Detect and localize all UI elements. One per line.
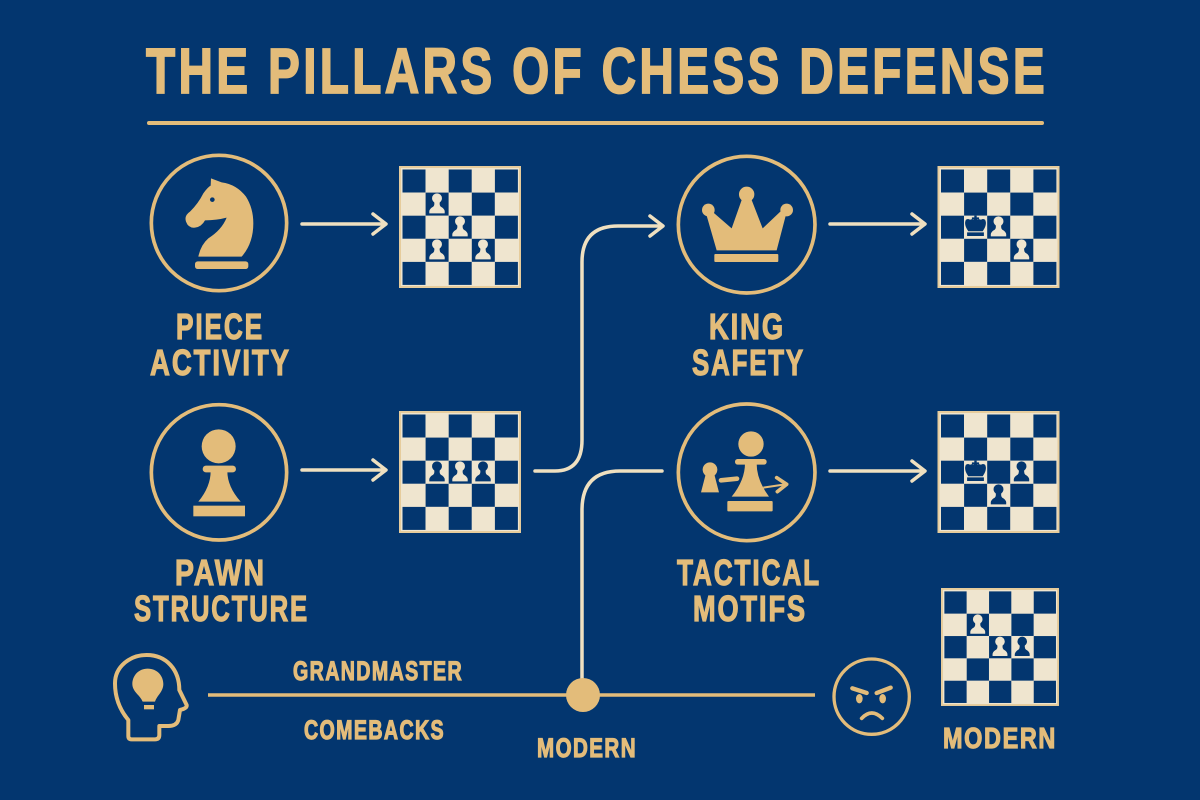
- icon: pawn: [151, 405, 287, 540]
- label: grandmaster: GRANDMASTER: [293, 656, 463, 686]
- label: tactical motifs: [677, 552, 821, 629]
- label: comebacks: COMEBACKS: [304, 715, 445, 745]
- label: pawn structure: [134, 552, 309, 629]
- label: piece activity: PIECE: [176, 306, 264, 347]
- arrow: tactical motifs to board: [830, 461, 925, 481]
- icon: tactical pawn with arrow: [678, 404, 815, 541]
- icon: knight: [151, 155, 287, 291]
- panel: tactical motifs: [677, 404, 821, 629]
- arrow: king safety to board: [830, 214, 925, 234]
- chess board: king safety: [938, 167, 1058, 287]
- icon: angry face: [834, 659, 909, 734]
- connector: pawn structure board to king safety: [535, 216, 663, 471]
- label: king safety: KING: [709, 306, 785, 347]
- timeline: [208, 678, 815, 712]
- label: tactical motifs: TACTICAL: [677, 552, 821, 593]
- panel: piece activity: [150, 155, 291, 383]
- label: tactical motifs: MOTIFS: [693, 588, 807, 629]
- arrow: pawn structure to board: [302, 460, 386, 480]
- icon: head with lightbulb: [115, 655, 187, 739]
- label: modern timeline: MODERN: [537, 733, 637, 763]
- label: king safety: SAFETY: [692, 342, 805, 383]
- chess board: pawn structure: [400, 412, 520, 532]
- label: pawn structure: STRUCTURE: [134, 588, 309, 629]
- arrow: piece activity to board: [302, 214, 386, 234]
- label: modern board: MODERN: [943, 723, 1057, 755]
- icon: crown: [678, 156, 815, 293]
- label: piece activity: [150, 306, 291, 383]
- chess board: tactical motifs: [938, 412, 1058, 532]
- label: pawn structure: PAWN: [175, 552, 266, 593]
- panel: king safety: [678, 156, 815, 383]
- chess board: modern: [942, 589, 1058, 705]
- label: piece activity: ACTIVITY: [150, 342, 291, 383]
- panel: pawn structure: [134, 405, 309, 629]
- connector: timeline to tactical motifs: [582, 471, 662, 695]
- chess board: piece activity: [400, 167, 520, 287]
- label: king safety: [692, 306, 805, 383]
